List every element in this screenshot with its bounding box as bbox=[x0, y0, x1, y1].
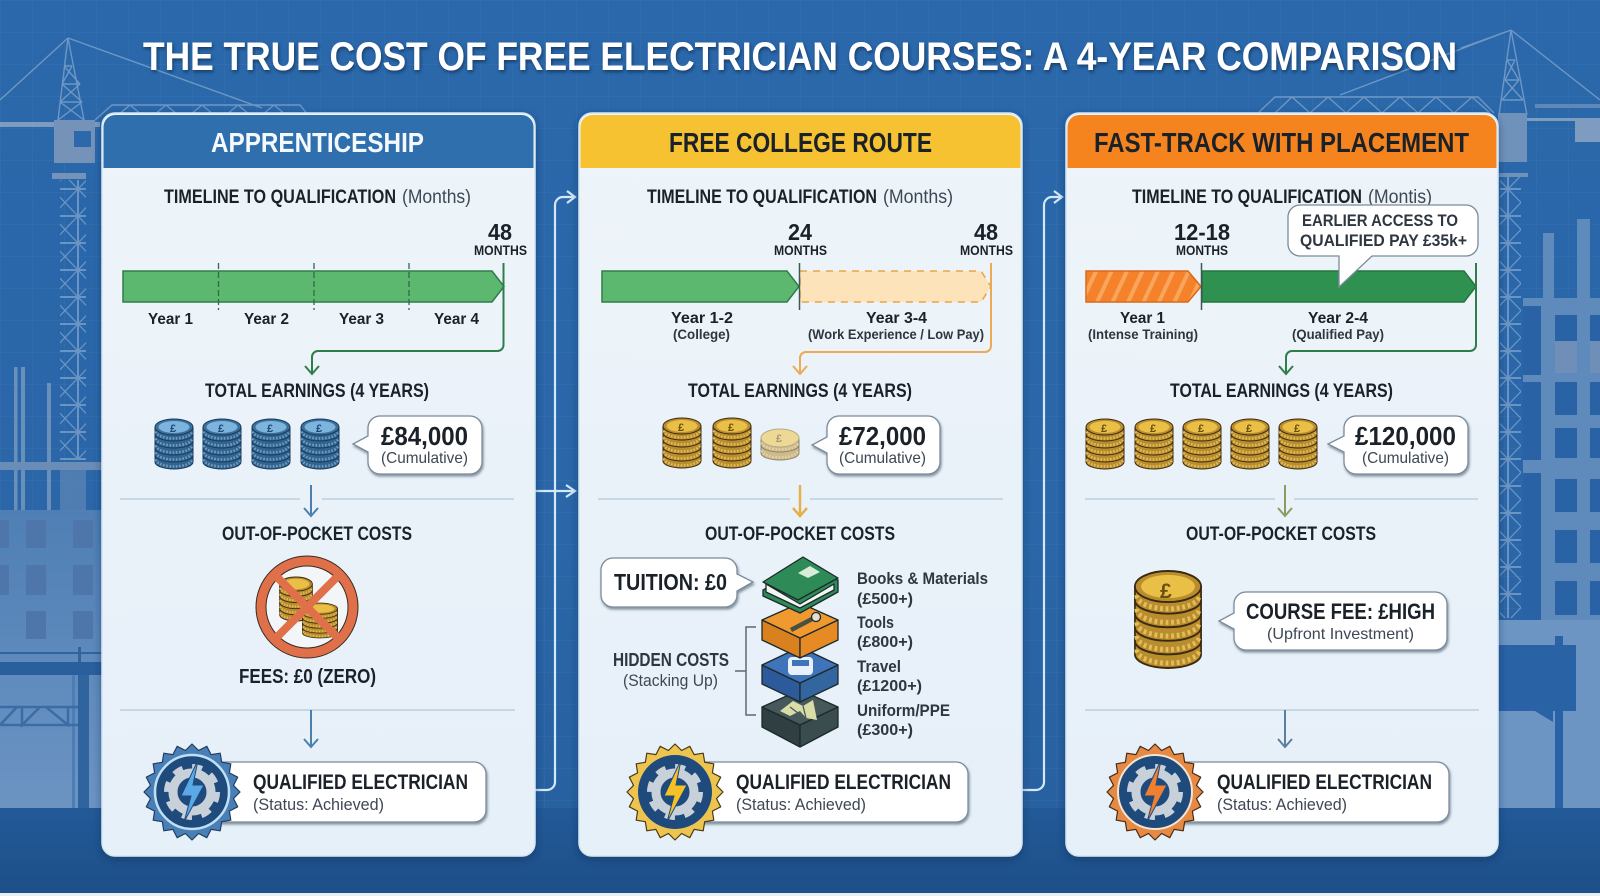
timeline heading: (Months) bbox=[402, 187, 471, 208]
icon: no fees crossed coins bbox=[261, 561, 353, 653]
icon: orange badge bbox=[1107, 744, 1203, 840]
timeline heading: TIMELINE TO QUALIFICATION bbox=[164, 187, 396, 208]
arrow: earnings to costs bbox=[793, 485, 807, 516]
status box: qualified electrician: (Status: Achieved) bbox=[253, 795, 384, 814]
milestone: 48 months: 48 bbox=[488, 219, 512, 245]
year labels: Year 3 bbox=[339, 311, 384, 328]
icon: tall coin stack bbox=[1135, 571, 1201, 668]
callout: course fee: (Upfront Investment) bbox=[1267, 626, 1414, 643]
hidden costs label: (Stacking Up) bbox=[623, 671, 718, 690]
coin stacks: blue: £ bbox=[170, 423, 176, 435]
cost item labels: Travel bbox=[857, 657, 901, 676]
icon: tall coin stack: £ bbox=[1160, 580, 1172, 603]
cost item labels: (£500+) bbox=[857, 591, 913, 608]
bracket: hidden costs bbox=[735, 627, 756, 715]
milestone: 12-18 months bbox=[1174, 219, 1230, 310]
icon: blue badge bbox=[144, 744, 240, 840]
arrow: timeline to earnings bbox=[793, 263, 991, 374]
callout: £72,000 bbox=[812, 416, 940, 474]
phase labels: Year 1-2 bbox=[671, 310, 733, 327]
coin stacks: gold: £ bbox=[1294, 423, 1300, 435]
coin stacks: gold: £ bbox=[776, 433, 782, 445]
milestone: 48 months bbox=[960, 219, 1013, 258]
coin stacks: gold: £ bbox=[1101, 423, 1107, 435]
milestone: 12-18 months: 12-18 bbox=[1174, 219, 1230, 245]
phase labels: Year 2-4 bbox=[1308, 310, 1368, 327]
status box: qualified electrician: QUALIFIED ELECTRICIAN bbox=[736, 771, 951, 794]
callout: £84,000: (Cumulative) bbox=[381, 450, 468, 467]
year labels: Year 2 bbox=[244, 311, 289, 328]
cost item labels: (£300+) bbox=[857, 722, 913, 739]
arrow: timeline to earnings bbox=[305, 263, 504, 374]
cost item labels: (£1200+) bbox=[857, 678, 922, 695]
arrow: costs to status bbox=[1278, 710, 1292, 747]
hidden costs label: HIDDEN COSTS bbox=[613, 650, 729, 670]
phase labels bbox=[1088, 310, 1384, 342]
timeline heading: TIMELINE TO QUALIFICATION bbox=[1132, 187, 1362, 208]
phase labels: Year 1 bbox=[1120, 310, 1165, 327]
callout: £120,000: (Cumulative) bbox=[1362, 450, 1449, 467]
timeline bar: college bbox=[602, 271, 799, 302]
coin stacks: blue: £ bbox=[218, 423, 224, 435]
earnings heading: TOTAL EARNINGS (4 YEARS) bbox=[205, 381, 429, 402]
title: THE TRUE COST OF FREE ELECTRICIAN COURSES: A 4-YEAR COMPARISON bbox=[143, 35, 1457, 79]
fees label: FEES: £0 (ZERO) bbox=[239, 666, 376, 688]
panel header: apprenticeship bbox=[104, 115, 534, 168]
panel header: fast-track bbox=[1068, 115, 1496, 168]
cost item labels: Uniform/PPE bbox=[857, 701, 950, 720]
milestone: 48 months: 48 bbox=[974, 219, 998, 245]
year labels: Year 1 bbox=[148, 311, 193, 328]
phase labels: Year 3-4 bbox=[866, 310, 927, 327]
timeline heading: (Months) bbox=[883, 187, 953, 208]
block: uniform bbox=[762, 690, 838, 747]
arrow: timeline to earnings bbox=[1279, 263, 1476, 374]
callout: £84,000: £84,000 bbox=[381, 421, 468, 451]
costs heading: OUT-OF-POCKET COSTS bbox=[1186, 524, 1376, 545]
coin stacks: gold: £ bbox=[1246, 423, 1252, 435]
panel: fast-track with placement bbox=[1066, 113, 1498, 856]
cost item labels: (£800+) bbox=[857, 634, 913, 651]
status box: qualified electrician: (Status: Achieved) bbox=[1217, 795, 1347, 814]
callout: £84,000 bbox=[353, 416, 482, 474]
callout: course fee bbox=[1219, 592, 1447, 650]
coin stacks: gold: £ bbox=[1150, 423, 1156, 435]
callout: £120,000: £120,000 bbox=[1355, 421, 1456, 451]
coin stacks: gold: £ bbox=[728, 422, 734, 434]
status box: qualified electrician: QUALIFIED ELECTRICIAN bbox=[253, 771, 468, 794]
stacked cost blocks bbox=[762, 557, 838, 747]
hidden costs label bbox=[613, 650, 729, 690]
arrow: earnings to costs bbox=[304, 485, 318, 516]
callout: earlier access: QUALIFIED PAY £35k+ bbox=[1300, 231, 1467, 250]
callout: tuition £0: TUITION: £0 bbox=[614, 569, 727, 595]
year labels bbox=[148, 311, 479, 328]
flow arrow: apprenticeship to free college, top route bbox=[535, 191, 575, 790]
block: tools bbox=[762, 603, 838, 658]
callout: earlier access bbox=[1288, 205, 1478, 287]
costs heading: OUT-OF-POCKET COSTS bbox=[705, 524, 895, 545]
milestone: 24 months: 24 bbox=[788, 219, 812, 245]
panel: apprenticeship bbox=[102, 113, 535, 856]
milestone: 48 months: MONTHS bbox=[960, 242, 1013, 258]
costs heading: OUT-OF-POCKET COSTS bbox=[222, 524, 412, 545]
status box: qualified electrician bbox=[685, 762, 968, 822]
timeline bar: 48 months bbox=[123, 263, 504, 310]
panel: free college route bbox=[579, 113, 1022, 856]
cost item labels bbox=[857, 569, 988, 739]
phase labels: (College) bbox=[673, 326, 730, 342]
coin stacks: blue: £ bbox=[267, 423, 273, 435]
earnings heading: TOTAL EARNINGS (4 YEARS) bbox=[688, 381, 912, 402]
block: books bbox=[763, 557, 838, 613]
flow arrow: free college to fast-track bbox=[1022, 191, 1062, 790]
phase labels: (Intense Training) bbox=[1088, 326, 1198, 342]
callout: earlier access: EARLIER ACCESS TO bbox=[1302, 211, 1458, 230]
earnings heading: TOTAL EARNINGS (4 YEARS) bbox=[1170, 381, 1393, 402]
callout: £72,000: £72,000 bbox=[839, 421, 926, 451]
panel header: free college bbox=[580, 115, 1020, 168]
timeline bar: work experience dashed bbox=[800, 271, 991, 302]
timeline heading: TIMELINE TO QUALIFICATION bbox=[647, 187, 877, 208]
milestone: 24 months: MONTHS bbox=[774, 242, 827, 258]
coin stacks: blue bbox=[155, 419, 339, 469]
status box: qualified electrician bbox=[1165, 762, 1449, 822]
icon: gold badge bbox=[627, 744, 723, 840]
callout: tuition £0 bbox=[601, 558, 753, 607]
phase labels: (Qualified Pay) bbox=[1292, 326, 1384, 342]
status box: qualified electrician: (Status: Achieved) bbox=[736, 795, 866, 814]
block: travel bbox=[762, 647, 838, 702]
callout: £120,000 bbox=[1328, 416, 1468, 474]
flow arrow: apprenticeship to free college, middle bbox=[535, 485, 575, 497]
milestone: 12-18 months: MONTHS bbox=[1176, 242, 1228, 258]
coin stacks: gold bbox=[1086, 419, 1317, 469]
year labels: Year 4 bbox=[434, 311, 479, 328]
coin stacks: gold: £ bbox=[678, 422, 684, 434]
status box: qualified electrician bbox=[200, 762, 486, 822]
callout: £72,000: (Cumulative) bbox=[839, 450, 926, 467]
status box: qualified electrician: QUALIFIED ELECTRICIAN bbox=[1217, 771, 1432, 794]
arrow: costs to status bbox=[304, 710, 318, 747]
callout: course fee: COURSE FEE: £HIGH bbox=[1246, 599, 1435, 624]
phase labels bbox=[671, 310, 984, 342]
phase labels: (Work Experience / Low Pay) bbox=[808, 326, 984, 342]
heading: free college route: FREE COLLEGE ROUTE bbox=[669, 127, 932, 158]
milestone: 48 months bbox=[474, 219, 527, 258]
milestone: 24 months bbox=[774, 219, 827, 310]
cost item labels: Books & Materials bbox=[857, 569, 988, 588]
cost item labels: Tools bbox=[857, 613, 894, 632]
heading: fast-track with placement: FAST-TRACK WITH PLACEMENT bbox=[1094, 127, 1469, 158]
timeline bar: qualified pay bbox=[1202, 271, 1476, 302]
arrow: earnings to costs bbox=[1278, 485, 1292, 516]
heading: apprenticeship: APPRENTICESHIP bbox=[211, 127, 424, 158]
milestone: 48 months: MONTHS bbox=[474, 242, 527, 258]
coin stacks: gold: £ bbox=[1198, 423, 1204, 435]
timeline heading: (Montis) bbox=[1368, 187, 1432, 208]
coin stacks: gold bbox=[663, 418, 799, 468]
coin stacks: blue: £ bbox=[316, 423, 322, 435]
timeline bar: intense training bbox=[1086, 271, 1201, 302]
